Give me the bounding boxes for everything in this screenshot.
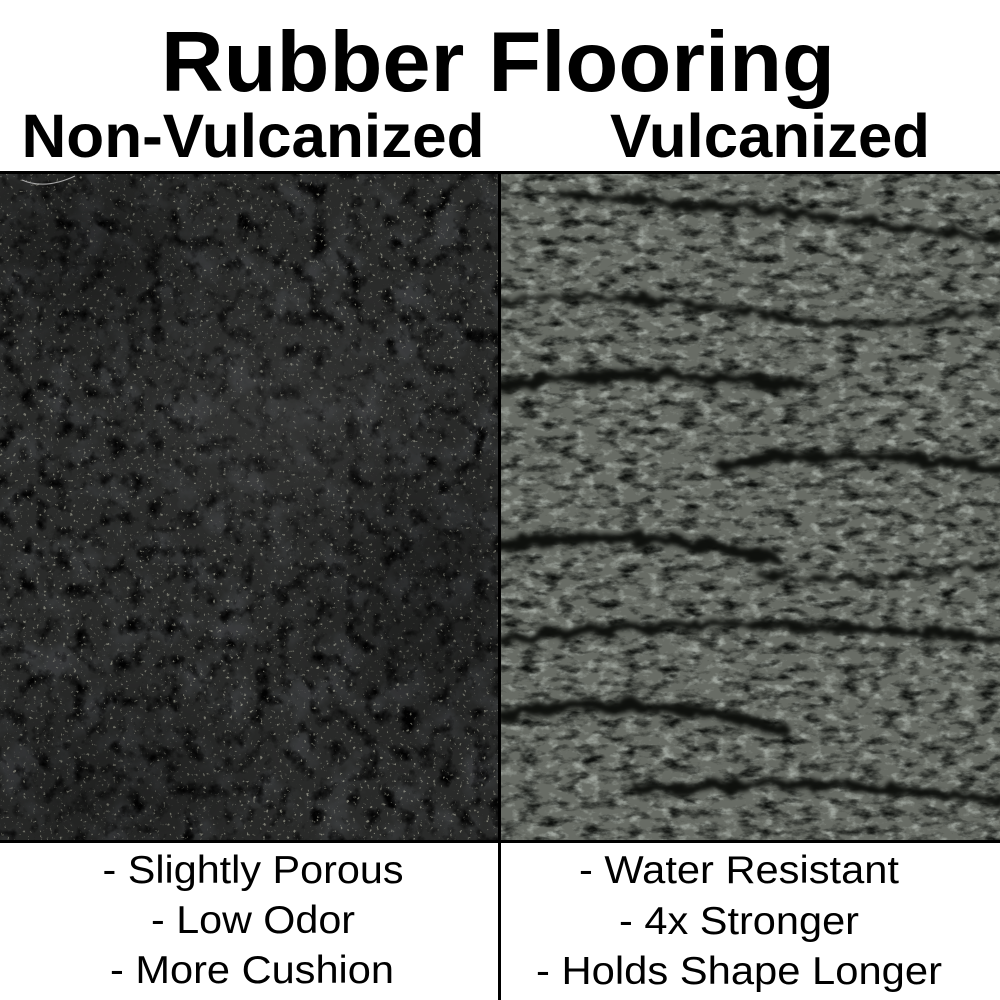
panel: non-vulcanized rubber photo texture <box>0 174 510 840</box>
stray fibre <box>22 176 75 184</box>
heading: vulcanized: Vulcanized <box>610 102 930 170</box>
title: Rubber Flooring <box>161 15 835 110</box>
text block: vulcanized properties: - 4x Stronger <box>619 900 859 943</box>
text block: non-vulcanized properties <box>102 849 404 992</box>
text block: vulcanized properties: - Holds Shape Longer <box>536 950 942 993</box>
text block: non-vulcanized properties: - Low Odor <box>151 899 355 942</box>
divider: bottom rule <box>0 840 1000 843</box>
text block: vulcanized properties <box>536 849 942 993</box>
text block: vulcanized properties: - Water Resistant <box>579 849 899 892</box>
divider: centre rule <box>498 171 501 1000</box>
text block: non-vulcanized properties: - More Cushion <box>110 949 394 992</box>
text block: non-vulcanized properties: - Slightly Porous <box>102 849 404 892</box>
heading: non-vulcanized: Non-Vulcanized <box>22 102 484 170</box>
divider: top rule <box>0 171 1000 174</box>
tonal variation <box>0 180 510 840</box>
panel: vulcanized rubber photo texture <box>501 174 1000 840</box>
horizontal dark grooves <box>501 195 1000 800</box>
